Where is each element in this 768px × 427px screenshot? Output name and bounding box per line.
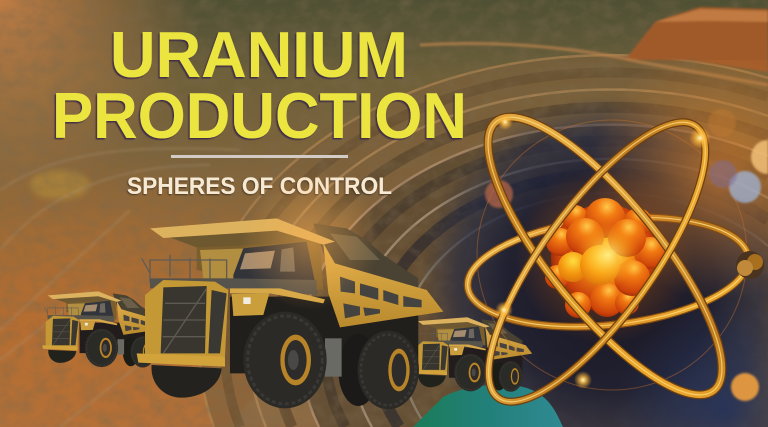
pit terraces <box>200 55 768 427</box>
nucleus <box>515 165 695 345</box>
sparks <box>495 114 711 389</box>
orbit: horizontal <box>462 205 754 339</box>
truck: left <box>42 291 165 368</box>
atom <box>453 87 768 427</box>
orbit: top-right to bottom-left <box>454 94 740 427</box>
faint thin orbit circle <box>477 120 747 390</box>
lens flares <box>485 109 768 401</box>
electron <box>736 251 764 279</box>
truck: main <box>137 218 443 409</box>
title: PRODUCTION <box>52 79 467 152</box>
truck: right <box>413 317 532 392</box>
sun glow on truck <box>240 170 380 310</box>
teal pool <box>413 385 563 427</box>
rock face under trucks <box>230 320 440 427</box>
orbit: top-left to bottom-right <box>453 87 757 425</box>
subtitle: SPHERES OF CONTROL <box>127 173 392 200</box>
title: URANIUM <box>110 18 408 91</box>
title <box>52 18 467 152</box>
dark pit colouring <box>420 95 768 427</box>
divider line <box>171 155 348 158</box>
spoil mound <box>625 7 768 72</box>
